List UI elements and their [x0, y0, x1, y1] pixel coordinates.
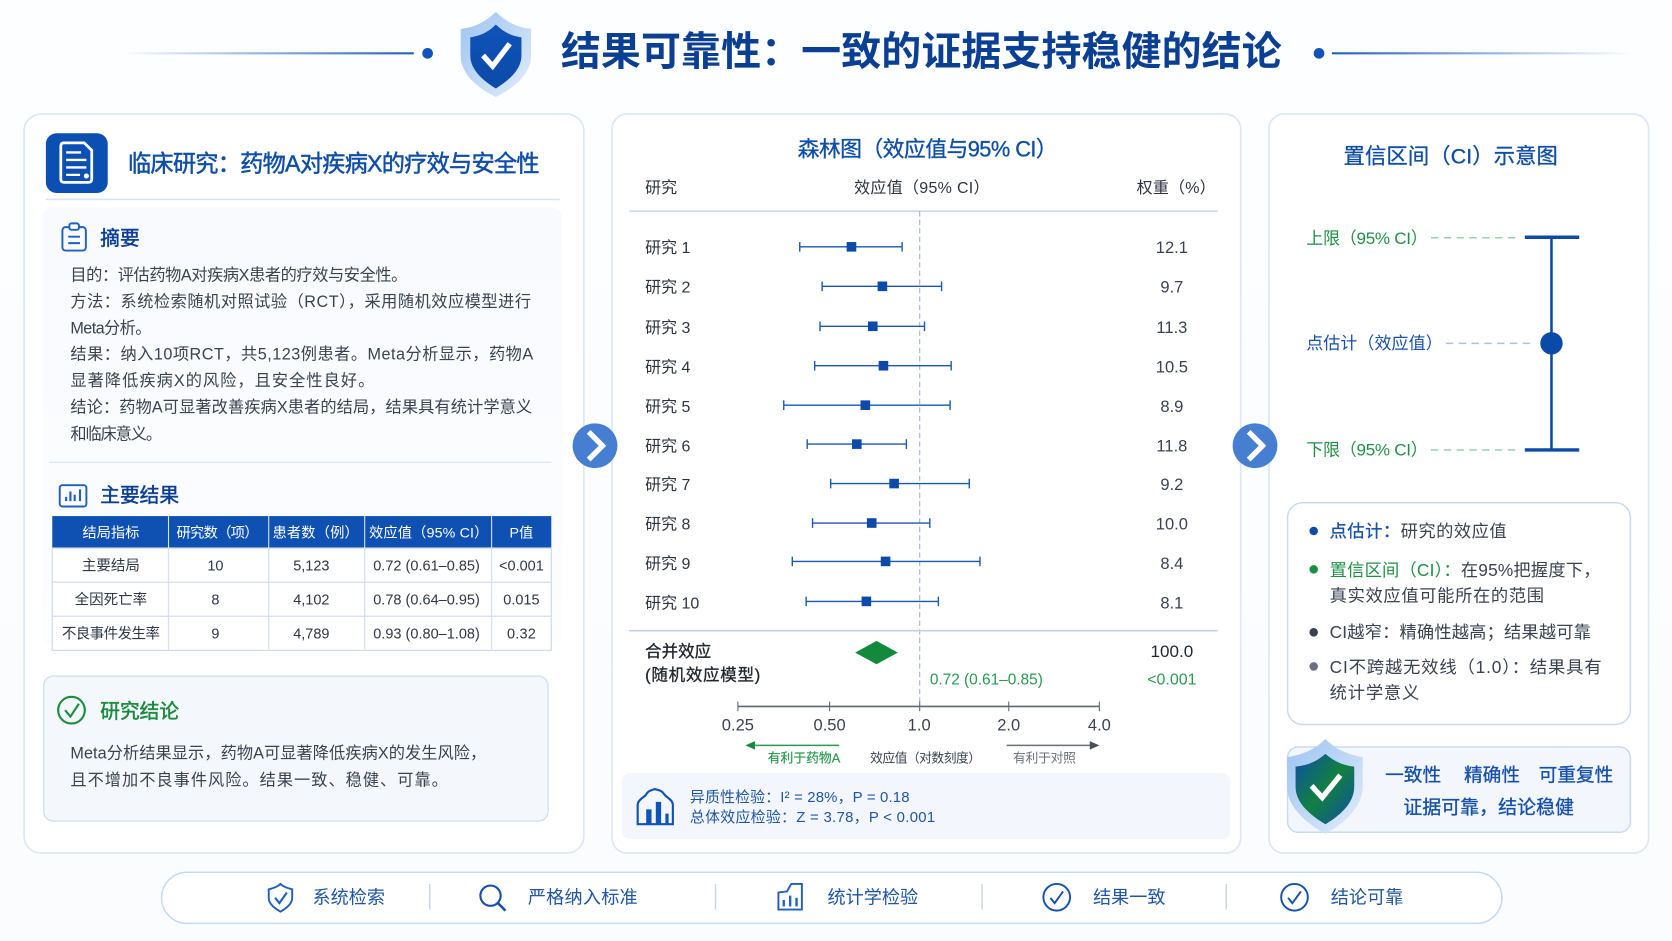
section: main results: 主要结果	[100, 485, 179, 507]
CI legend	[1288, 503, 1630, 725]
CI legend: 置信区间（CI）：在95%把握度下，	[1330, 560, 1601, 580]
forest plot rows: 研究 10	[645, 594, 699, 612]
icon: green shield	[1287, 739, 1363, 834]
results table: 4,102	[293, 593, 330, 609]
results table: 10	[207, 558, 223, 574]
forest plot rows: 12.1	[1156, 238, 1188, 257]
forest plot rows: 研究 1	[645, 239, 691, 257]
callout: study conclusion: 研究结论	[100, 701, 179, 723]
forest plot rows: 研究 7	[645, 476, 691, 494]
footer item: statistical test: 统计学检验	[827, 888, 918, 908]
footer bar	[162, 872, 1502, 923]
footer item: systematic search: 系统检索	[312, 888, 385, 908]
forest plot rows: 研究 5	[645, 398, 691, 416]
arrow: left to middle	[573, 423, 617, 468]
CI legend: CI越窄：精确性越高；结果越可靠	[1330, 622, 1591, 642]
results table: P值	[510, 524, 533, 541]
icon: document	[46, 133, 108, 193]
results table: <0.001	[499, 558, 544, 574]
panel: forest plot	[612, 114, 1241, 853]
results table: 全因死亡率	[75, 591, 147, 609]
forest plot rows: 8.9	[1160, 397, 1183, 416]
callout: study conclusion: 且不增加不良事件风险。结果一致、稳健、可靠。	[70, 771, 448, 789]
footer item: consistent results: 结果一致	[1093, 888, 1165, 908]
footer item: reliable conclusion: 结论可靠	[1331, 888, 1403, 908]
results table: 患者数（例）	[272, 524, 359, 541]
forest plot rows: 8.1	[1160, 593, 1183, 612]
forest plot rows: 研究 8	[645, 515, 691, 533]
panel heading: 临床研究：药物A对疾病X的疗效与安全性	[128, 151, 540, 177]
panel: clinical study	[24, 114, 584, 853]
arrow: favours drug A: 有利于药物A	[768, 750, 841, 765]
CI legend: CI不跨越无效线（1.0）：结果具有	[1330, 657, 1602, 677]
abstract text: 显著降低疾病X的风险，且安全性良好。	[70, 372, 374, 390]
arrow: favours control	[1007, 741, 1099, 765]
abstract text: 和临床意义。	[70, 424, 162, 443]
abstract text: 结果：纳入10项RCT，共5,123例患者。Meta分析显示，药物A	[70, 345, 533, 363]
log-scale axis	[722, 702, 1111, 765]
reliability badge: 证据可靠，结论稳健	[1403, 797, 1574, 819]
CI legend: 真实效应值可能所在的范围	[1330, 585, 1544, 605]
CI diagram: 下限（95% CI）	[1306, 440, 1428, 459]
results table: 0.32	[507, 627, 536, 643]
CI diagram: 点估计（效应值）	[1306, 334, 1443, 353]
callout: study conclusion: Meta分析结果显示，药物A可显著降低疾病X的发生风险，	[70, 745, 486, 763]
forest plot rows: 研究 3	[645, 319, 691, 337]
forest plot rows: 研究 9	[645, 555, 691, 573]
heterogeneity box: 总体效应检验：Z = 3.78，P < 0.001	[690, 808, 935, 826]
log-scale axis: 0.50	[814, 715, 846, 734]
abstract text: 结论：药物A可显著改善疾病X患者的结局，结果具有统计学意义	[70, 398, 532, 417]
forest plot rows: 10.0	[1156, 514, 1188, 533]
column headers	[645, 178, 1216, 197]
panel: confidence interval	[1269, 114, 1649, 853]
callout: study conclusion	[44, 676, 548, 821]
forest plot rows: 8.4	[1160, 554, 1183, 573]
forest plot rows	[645, 238, 1188, 612]
section: abstract	[62, 223, 533, 443]
icon: house chart	[638, 789, 673, 824]
results table: 9	[211, 627, 219, 643]
results table: 结局指标	[82, 524, 139, 541]
reliability badge: 一致性	[1385, 765, 1441, 786]
forest plot rows: 10.5	[1156, 358, 1188, 377]
pooled effect row: (随机效应模型)	[645, 665, 760, 684]
forest plot rows: 研究 6	[645, 438, 691, 456]
forest plot rows: 研究 2	[645, 279, 691, 297]
reliability badge: 精确性	[1464, 765, 1520, 786]
results table: 0.72 (0.61–0.85)	[373, 558, 480, 574]
footer item: inclusion criteria	[480, 886, 638, 911]
column headers: 效应值（95% CI）	[854, 178, 990, 197]
CI legend: 点估计：研究的效应值	[1330, 521, 1507, 541]
icon: title shield	[461, 12, 531, 97]
icon: green check	[58, 697, 85, 723]
log-scale axis: 0.25	[722, 715, 754, 734]
arrow: favours drug A	[745, 741, 841, 765]
column headers: 研究	[645, 179, 677, 197]
results table: 0.015	[503, 593, 540, 609]
CI diagram	[1306, 229, 1579, 459]
pooled effect row: <0.001	[1147, 672, 1197, 689]
results table: 效应值（95% CI）	[369, 523, 488, 541]
section: main results	[52, 485, 551, 650]
footer item: statistical test	[778, 884, 918, 910]
results table: 8	[211, 593, 219, 609]
forest plot rows: 9.7	[1160, 278, 1183, 297]
results table: 0.78 (0.64–0.95)	[373, 593, 480, 609]
reliability badge	[1287, 739, 1630, 834]
results table	[52, 516, 551, 650]
abstract text: 目的：评估药物A对疾病X患者的疗效与安全性。	[70, 266, 407, 284]
results table: 5,123	[293, 558, 330, 574]
log-scale axis: 2.0	[997, 715, 1020, 734]
forest plot rows: 9.2	[1160, 475, 1183, 494]
title banner: 结果可靠性：一致的证据支持稳健的结论	[561, 30, 1282, 74]
CI legend: 统计学意义	[1330, 682, 1419, 702]
pooled effect row: 合并效应	[645, 642, 711, 661]
abstract text: Meta分析。	[70, 320, 151, 338]
footer item: systematic search	[269, 884, 385, 912]
CI heading: 置信区间（CI）示意图	[1344, 145, 1558, 169]
pooled effect row: 0.72 (0.61–0.85)	[930, 672, 1043, 689]
log-scale axis: 1.0	[908, 715, 931, 734]
column headers: 权重（%）	[1137, 179, 1216, 197]
footer item: reliable conclusion	[1281, 884, 1403, 911]
log-scale axis: 效应值（对数刻度）	[870, 750, 981, 765]
results table: 主要结局	[82, 557, 140, 574]
footer item: inclusion criteria: 严格纳入标准	[528, 888, 638, 908]
results table: 不良事件发生率	[62, 626, 160, 643]
arrow: middle to right	[1233, 423, 1277, 468]
results table: 研究数（项）	[177, 524, 259, 541]
CI diagram: 上限（95% CI）	[1306, 229, 1428, 248]
results table: 4,789	[293, 627, 330, 643]
icon: clipboard	[62, 223, 86, 251]
forest plot rows: 11.8	[1156, 437, 1187, 456]
forest plot rows: 研究 4	[645, 359, 691, 377]
results table: 0.93 (0.80–1.08)	[373, 627, 480, 643]
arrow: favours control: 有利于对照	[1013, 750, 1076, 765]
log-scale axis: 4.0	[1088, 715, 1111, 734]
footer item: consistent results	[1043, 884, 1165, 911]
icon: chart	[60, 485, 86, 506]
abstract text	[70, 266, 533, 443]
forest plot heading: 森林图（效应值与95% CI）	[798, 137, 1058, 162]
pooled effect row	[645, 641, 1197, 689]
title banner	[123, 12, 1631, 97]
heterogeneity box	[622, 773, 1231, 839]
reliability badge: 可重复性	[1539, 765, 1613, 786]
abstract text: 方法：系统检索随机对照试验（RCT），采用随机效应模型进行	[70, 292, 531, 311]
forest plot rows: 11.3	[1156, 318, 1187, 337]
section: abstract: 摘要	[100, 228, 140, 250]
heterogeneity box: 异质性检验：I² = 28%，P = 0.18	[690, 789, 910, 806]
pooled effect row: 100.0	[1151, 642, 1193, 661]
